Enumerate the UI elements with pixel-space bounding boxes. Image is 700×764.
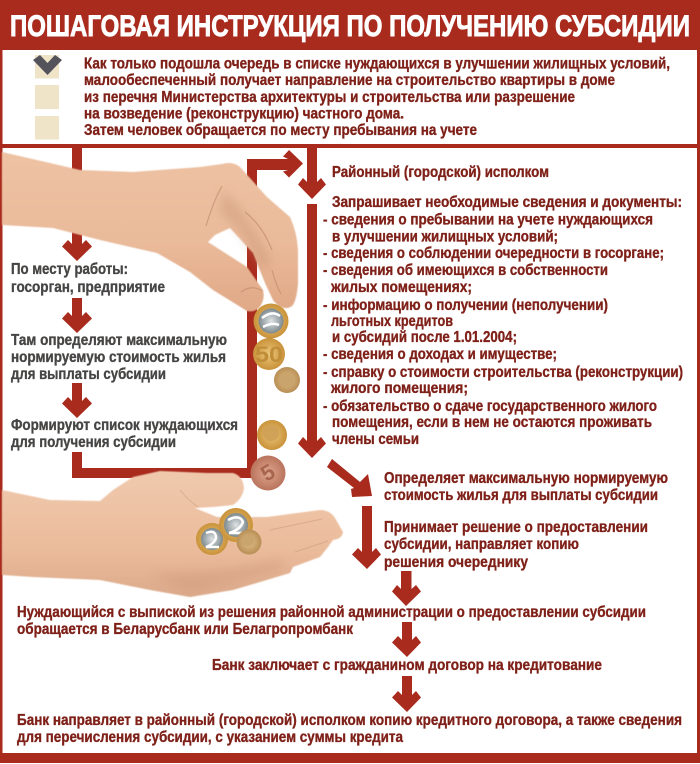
arrow: connector from list to executive committee (72, 150, 303, 478)
left column steps (11, 261, 238, 451)
text block: required documents: жилого помещения; (330, 380, 468, 397)
text block: required documents: в улучшении жилищных условий; (332, 228, 558, 246)
coin: gold falling (257, 420, 287, 450)
arrow: down to workplace (62, 146, 92, 261)
footer band (0, 753, 700, 763)
text block: bank contract: Банк заключает с гражданином договор на кредитование (212, 657, 602, 674)
arrow: diagonal to cost determination (327, 459, 372, 497)
step: workplace (11, 261, 165, 296)
text block: bank sends copy: для перечисления субсидии, с указанием суммы кредита (17, 729, 403, 746)
coin: bimetal 2 in palm, left (196, 523, 228, 555)
image: upper hand (2, 152, 298, 311)
text block: determines cost (384, 470, 668, 504)
coin: bimetal 2 falling (254, 304, 288, 338)
text block: required documents: - информацию о получении (неполучении) (323, 297, 608, 314)
arrow: down to bank transfer (392, 676, 421, 712)
step: maximum cost: Там определяют максимальную (11, 332, 227, 349)
text block: required documents: льготных кредитов (331, 313, 453, 330)
text block: determines cost: стоимость жилья для выплаты субсидии (384, 487, 658, 504)
step: list of applicants (11, 417, 238, 451)
step: maximum cost (11, 332, 227, 383)
text block: bank sends copy (17, 712, 682, 746)
arrow: long down along documents (298, 204, 326, 458)
text block: decision: Принимает решение о предоставлении (384, 519, 648, 536)
intro text block: из перечня Министерства архитектуры и строительства или разрешение (84, 89, 575, 106)
text block: required documents: - сведения об имеющихся в собственности (323, 262, 608, 279)
step: list of applicants: для получения субсидии (11, 434, 176, 451)
intro text block: малообеспеченный получает направление на строительство квартиры в доме (84, 72, 615, 89)
text block: required documents: и субсидий после 1.01.2004; (332, 329, 517, 346)
arrow: down to bank contract (392, 622, 421, 657)
coin: bimetal 2 in palm, right (219, 508, 253, 542)
text block: applicant goes to bank: обращается в Беларусбанк или Белагропромбанк (17, 621, 353, 638)
text block: required documents: жилых помещениях; (330, 279, 472, 296)
intro text block (84, 56, 670, 139)
heading: executive committee: Районный (городской) исполком (332, 164, 549, 181)
title banner (0, 0, 700, 50)
intro text block: Затем человек обращается по месту пребывания на учете (84, 122, 477, 139)
arrow: down to maximum cost (62, 298, 92, 333)
arrow: down to decision (352, 506, 381, 569)
step: maximum cost: для выплаты субсидии (11, 366, 166, 383)
step: workplace: По месту работы: (11, 261, 128, 278)
step: maximum cost: нормируемую стоимость жилья (11, 349, 226, 366)
text block: required documents: помещения, если в нем не остаются проживать (332, 414, 652, 431)
panel: checklist icons (33, 55, 62, 140)
text block: required documents: - сведения о доходах и имуществе; (323, 346, 557, 363)
text block: required documents: члены семьи (332, 431, 419, 448)
arrow: down to list (62, 383, 92, 418)
text block: decision (384, 519, 648, 571)
text block: decision: субсидии, направляет копию (384, 536, 579, 553)
coin: copper 5 (250, 456, 286, 490)
divider band (0, 144, 700, 148)
text block: decision: решения очереднику (384, 554, 528, 571)
coin: copper 5: 5 (256, 459, 279, 486)
step: workplace: госорган, предприятие (11, 279, 165, 296)
text block: applicant goes to bank (17, 604, 646, 638)
coin: 50 kopecks (253, 338, 285, 370)
coin: 50 kopecks: 50 (255, 342, 283, 367)
image: lower hand (2, 471, 343, 597)
coin: tan in palm (236, 530, 262, 554)
intro text block: на возведение (реконструкцию) частного дома. (84, 106, 404, 122)
arrow: down to executive committee (298, 148, 326, 199)
step: list of applicants: Формируют список нуждающихся (11, 417, 238, 434)
arrow: down to applicant (392, 571, 421, 606)
text block: required documents: - сведения о пребывании на учете нуждающихся (323, 212, 653, 228)
text block: required documents (323, 194, 683, 448)
coin: small tan falling (274, 367, 300, 393)
